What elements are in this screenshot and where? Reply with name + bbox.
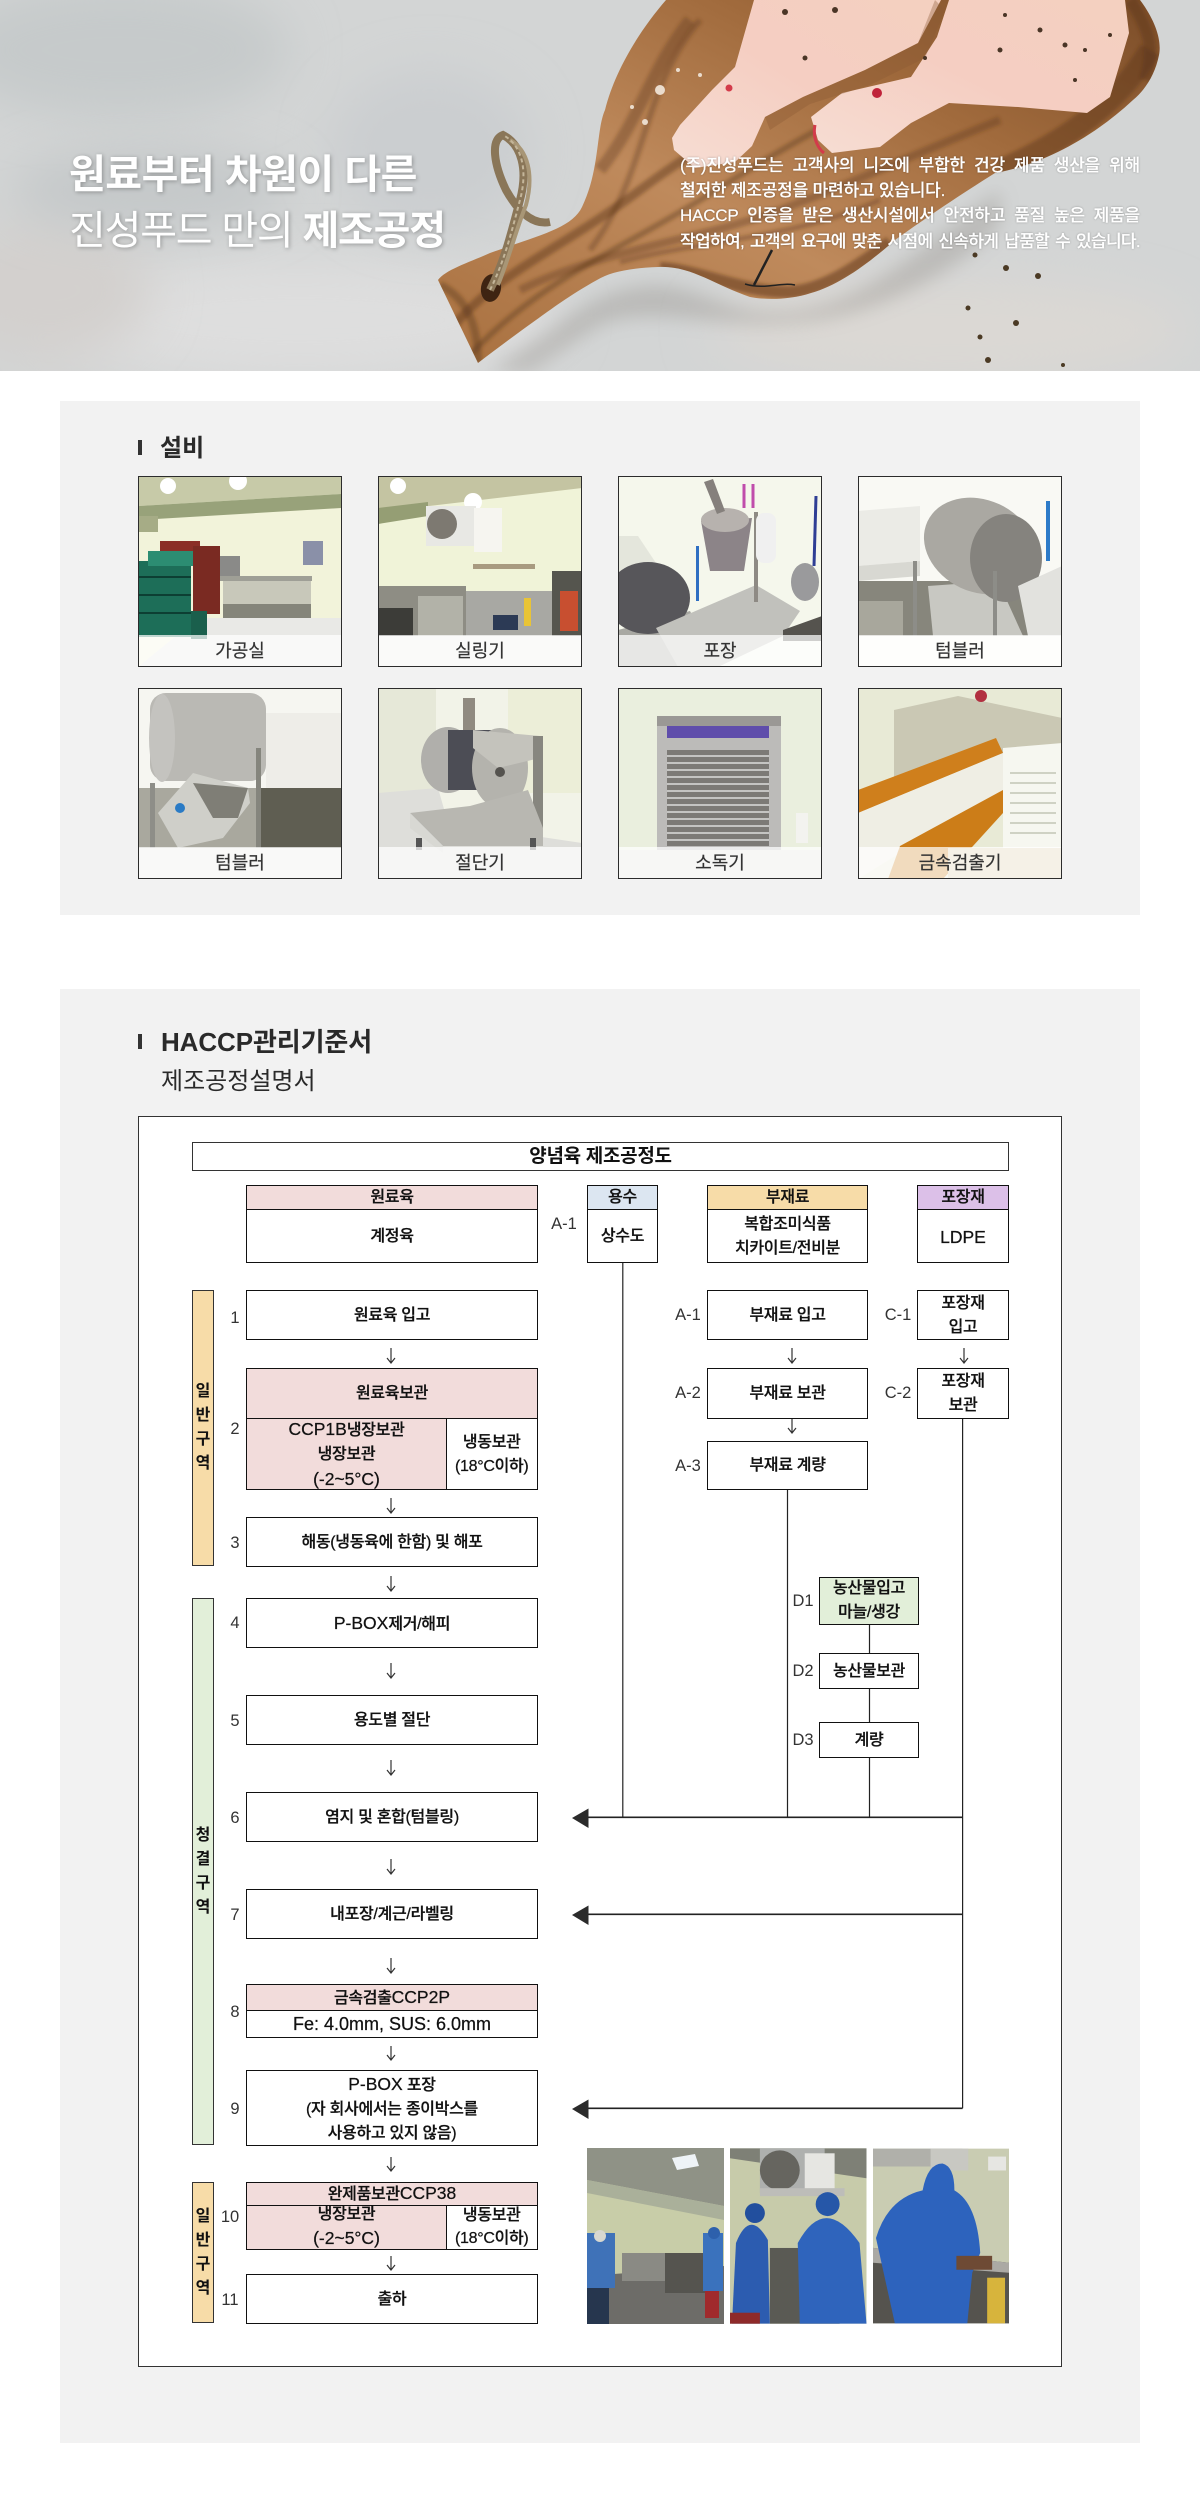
box A-3: 부재료 계량 — [749, 1457, 826, 1474]
zone: general 2: 구 — [196, 2256, 210, 2272]
step 10 frozen — [446, 2205, 538, 2250]
zone: clean: 청 — [196, 1826, 210, 1844]
step 9: 사용하고 있지 않음) — [328, 2125, 456, 2142]
arrow to step 7 — [586, 1913, 963, 1915]
panel: equipment — [60, 401, 1140, 915]
hero photo: chicken on wooden board — [0, 0, 1200, 371]
source box: raw meat — [246, 1185, 538, 1263]
caption: 포장 — [703, 641, 737, 661]
photo: worker close-up — [873, 2148, 1009, 2324]
step 4: P-BOX제거/해피 — [334, 1613, 450, 1633]
step numbers — [221, 1309, 240, 2309]
step numbers: 5 — [230, 1712, 240, 1730]
photo: workers at station — [730, 2148, 866, 2324]
step numbers: 10 — [221, 2208, 239, 2226]
step numbers: 7 — [230, 1906, 240, 1924]
heading marker — [138, 440, 142, 455]
zone: general 1: 반 — [196, 1407, 210, 1424]
caption — [139, 847, 341, 878]
caption: 가공실 — [215, 641, 265, 661]
step numbers: 6 — [230, 1809, 240, 1827]
caption: 소독기 — [695, 853, 745, 873]
step 5 — [246, 1695, 538, 1745]
box C-1 — [917, 1290, 1009, 1340]
hero heading: 원료부터 차원이 다른 — [69, 153, 417, 197]
box C-2 — [917, 1368, 1009, 1418]
header: 용수 — [608, 1188, 637, 1206]
photo tile: metal detector — [858, 688, 1062, 879]
step 2 chilled: 냉장보관 — [318, 1446, 375, 1462]
caption — [859, 635, 1061, 666]
panel: HACCP — [60, 989, 1140, 2443]
caption — [379, 847, 581, 878]
caption — [859, 847, 1061, 878]
photo tile: sealer — [378, 476, 582, 667]
step 6 — [246, 1792, 538, 1842]
flow chart title — [192, 1142, 1009, 1171]
step numbers: 11 — [221, 2291, 239, 2309]
caption — [379, 635, 581, 666]
body — [917, 1208, 1009, 1263]
step 2 frozen: (18°C이하) — [455, 1458, 528, 1474]
hero heading: 진성푸드 만의 제조공정 — [69, 209, 445, 253]
box D1 — [819, 1577, 919, 1625]
box A-2 — [707, 1368, 868, 1418]
step 2 frozen: 냉동보관 — [463, 1434, 521, 1450]
step 8 group — [246, 1984, 538, 2038]
step numbers: 1 — [230, 1309, 240, 1327]
label A-1: A-1 — [675, 1306, 701, 1324]
box A-2: 부재료 보관 — [749, 1385, 826, 1402]
hero paragraph: 작업하여, 고객의 요구에 맞춘 시점에 신속하게 납품할 수 있습니다. — [680, 232, 1140, 251]
box C-1: 입고 — [949, 1319, 977, 1336]
caption: 텀블러 — [215, 853, 265, 873]
zone: general 1: 일 — [196, 1383, 210, 1400]
source box: packaging — [917, 1185, 1009, 1263]
box A-3 — [707, 1441, 868, 1490]
step 3: 해동(냉동육에 한함) 및 해포 — [301, 1534, 483, 1551]
step 8 limits — [246, 2010, 538, 2038]
label A-2: A-2 — [675, 1384, 701, 1402]
heading: equipment: 설비 — [160, 435, 204, 462]
header — [587, 1185, 658, 1210]
header: 포장재 — [941, 1188, 985, 1206]
box A-1: 부재료 입고 — [749, 1307, 826, 1324]
zone: clean: 결 — [196, 1850, 210, 1868]
photo tile: cutter — [378, 688, 582, 879]
body — [246, 1208, 538, 1263]
step 11: 출하 — [378, 2291, 406, 2308]
arrow to step 9 — [586, 2107, 963, 2109]
hero paragraph: 철저한 제조공정을 마련하고 있습니다. — [680, 181, 945, 200]
line: subsidiary materials — [786, 1489, 788, 1817]
step 5: 용도별 절단 — [354, 1712, 430, 1729]
step 6: 염지 및 혼합(텀블링) — [325, 1809, 459, 1826]
body: 상수도 — [601, 1228, 644, 1244]
zone: clean — [192, 1598, 214, 2145]
arrow to step 6 — [586, 1816, 963, 1818]
source box: water — [587, 1185, 658, 1263]
zone: general 2 — [192, 2182, 214, 2323]
zone: general 1 — [192, 1290, 214, 1566]
hero heading — [69, 153, 446, 253]
step 2 header — [246, 1368, 538, 1419]
caption — [619, 847, 821, 878]
photo tile: sterilizer — [618, 688, 822, 879]
step 4 — [246, 1598, 538, 1648]
down arrows right columns — [788, 1348, 968, 1433]
step 9 — [246, 2070, 538, 2146]
box D1: 농산물입고 — [833, 1580, 905, 1597]
zone: general 2: 역 — [196, 2280, 210, 2296]
step 2 chilled: (-2~5°C) — [313, 1468, 380, 1488]
arrowhead to step 9 — [572, 2100, 588, 2119]
step 8 header — [246, 1984, 538, 2012]
step 11 — [246, 2274, 538, 2324]
step numbers: 3 — [230, 1534, 240, 1552]
zone: general 1: 구 — [196, 1431, 210, 1448]
step 9: (자 회사에서는 종이박스를 — [306, 2101, 478, 2118]
caption — [139, 635, 341, 666]
line: agricultural products — [868, 1624, 870, 1817]
label A-3: A-3 — [675, 1457, 701, 1475]
box D3: 계량 — [855, 1732, 883, 1749]
box D3 — [819, 1722, 919, 1758]
step 1 — [246, 1290, 538, 1340]
hero paragraph: HACCP 인증을 받은 생산시설에서 안전하고 품질 높은 제품을 — [680, 206, 1140, 225]
step 8 limits: Fe: 4.0mm, SUS: 6.0mm — [293, 2014, 491, 2034]
line: packaging — [962, 1418, 964, 2108]
header — [246, 1185, 538, 1210]
step numbers: 2 — [230, 1420, 240, 1438]
step 2 header: 원료육보관 — [356, 1385, 428, 1402]
body: 계정육 — [370, 1228, 414, 1244]
step 7 — [246, 1889, 538, 1939]
flow chart title: 양념육 제조공정도 — [529, 1146, 672, 1167]
zone: general 2: 일 — [196, 2208, 210, 2224]
subheading: process description: 제조공정설명서 — [161, 1068, 316, 1095]
step 2 chilled: CCP1B냉장보관 — [288, 1418, 405, 1438]
photo: workers wide view — [587, 2148, 724, 2324]
header — [707, 1185, 868, 1210]
step 8 header: 금속검출CCP2P — [334, 1987, 450, 2007]
photo tile: tumbler — [858, 476, 1062, 667]
hero paragraph — [680, 156, 1140, 251]
box A-1 — [707, 1290, 868, 1340]
body — [587, 1208, 658, 1263]
caption — [619, 635, 821, 666]
step 10 chilled: 냉장보관 — [318, 2206, 375, 2223]
zone: clean: 구 — [196, 1874, 210, 1892]
label D1: D1 — [792, 1592, 814, 1610]
zone: general 1: 역 — [196, 1455, 210, 1472]
heading marker — [138, 1034, 142, 1049]
photo tile: packaging — [618, 476, 822, 667]
zone: clean: 역 — [196, 1898, 210, 1916]
step 10 chilled — [246, 2205, 447, 2250]
zone: general 2: 반 — [196, 2232, 210, 2248]
step 2 frozen — [446, 1418, 538, 1490]
step 1: 원료육 입고 — [354, 1307, 430, 1324]
label A-1: A-1 — [551, 1215, 577, 1233]
down arrows main column — [387, 1348, 395, 2270]
step 10 header — [246, 2182, 538, 2206]
header — [917, 1185, 1009, 1210]
line: water — [622, 1262, 624, 1817]
caption: 금속검출기 — [919, 853, 1001, 873]
step 9: P-BOX 포장 — [348, 2074, 436, 2094]
hero paragraph: (주)진성푸드는 고객사의 니즈에 부합한 건강 제품 생산을 위해 — [680, 156, 1140, 175]
step numbers: 9 — [230, 2100, 240, 2118]
body: 복합조미식품 — [744, 1216, 831, 1232]
label C-2: C-2 — [885, 1384, 911, 1402]
source box: subsidiary materials — [707, 1185, 868, 1263]
label D3: D3 — [792, 1731, 814, 1749]
step 10 frozen: (18°C이하) — [455, 2230, 528, 2246]
arrowhead to step 7 — [572, 1906, 588, 1925]
photo tile: tumbler 2 — [138, 688, 342, 879]
photo tile: processing room — [138, 476, 342, 667]
hero banner — [0, 0, 1200, 371]
box D2: 농산물보관 — [833, 1663, 905, 1680]
caption: 텀블러 — [935, 641, 985, 661]
body: 치카이트/전비분 — [735, 1240, 840, 1256]
step 7: 내포장/계근/라벨링 — [330, 1906, 454, 1923]
step numbers: 4 — [230, 1614, 240, 1632]
step 2 group — [246, 1368, 538, 1490]
step 2 chilled — [246, 1418, 447, 1490]
label C-1: C-1 — [885, 1306, 911, 1324]
body — [707, 1208, 868, 1263]
arrowhead to step 6 — [572, 1808, 588, 1828]
flow chart frame — [138, 1116, 1062, 2367]
box C-2: 보관 — [949, 1397, 977, 1414]
box C-2: 포장재 — [941, 1373, 985, 1390]
header: 원료육 — [370, 1188, 414, 1206]
step 10 chilled: (-2~5°C) — [313, 2228, 380, 2248]
header: 부재료 — [766, 1188, 809, 1206]
caption: 절단기 — [455, 853, 505, 873]
step 10 frozen: 냉동보관 — [463, 2207, 521, 2224]
heading: HACCP management standard: HACCP관리기준서 — [161, 1027, 372, 1057]
label D2: D2 — [792, 1662, 814, 1680]
body: LDPE — [940, 1226, 986, 1246]
step numbers: 8 — [230, 2003, 240, 2021]
box D1: 마늘/생강 — [838, 1604, 900, 1621]
box C-1: 포장재 — [941, 1295, 985, 1312]
caption: 실링기 — [455, 641, 505, 661]
box D2 — [819, 1653, 919, 1689]
step 10 header: 완제품보관CCP38 — [328, 2183, 456, 2203]
step 3 — [246, 1517, 538, 1567]
step 10 group — [246, 2182, 538, 2250]
